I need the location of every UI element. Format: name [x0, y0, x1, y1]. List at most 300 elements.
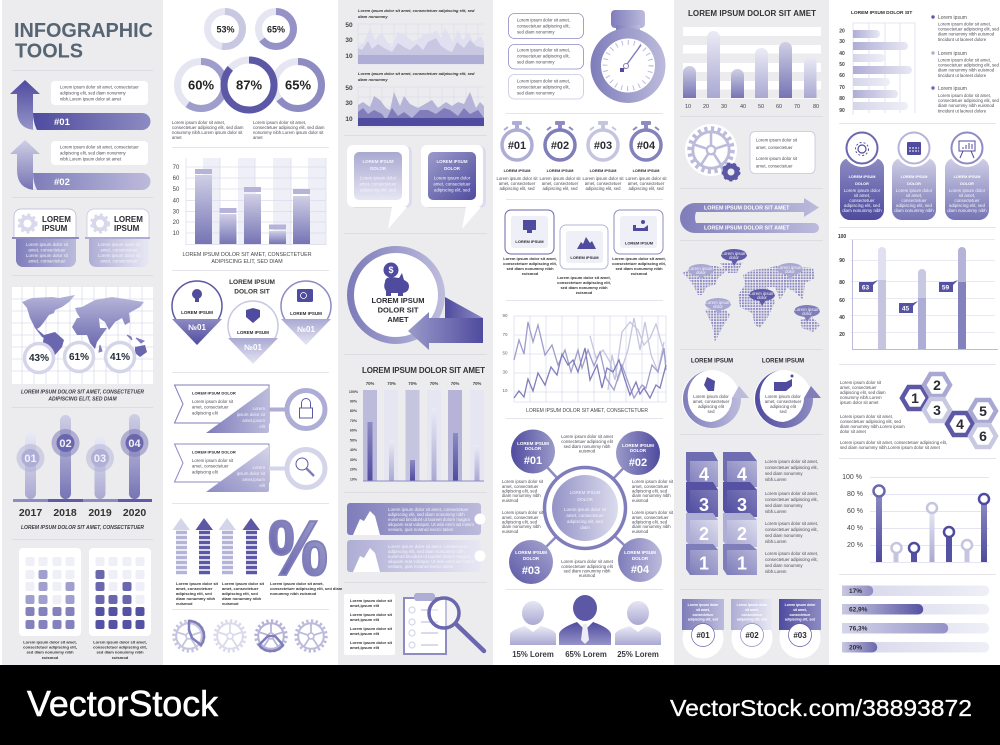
stacked arrow captions: adipiscing elit, sed: [176, 591, 212, 596]
small stopwatch 1: adipiscing elit, sed: [499, 186, 535, 191]
stacked number cubes: 3: [737, 495, 747, 515]
donut descriptions: nonummy nibh.Lorem ipsum dolor sit: [172, 130, 243, 135]
icon column card 1: consectetuer: [849, 198, 875, 203]
small stopwatch 2: #02: [551, 140, 569, 152]
hexagon descriptions: Lorem ipsum dolor sit amet, consectetuer adipiscing elit,: [840, 440, 947, 445]
stacked number cubes: 4: [737, 464, 747, 484]
text boxes top: sed diam nonummy: [517, 60, 555, 64]
arrow step 02: #02: [54, 177, 70, 188]
progress bars: 62,9%: [849, 606, 868, 614]
area chart 2: 50: [345, 85, 353, 92]
donut charts: [178, 12, 322, 110]
lollipop chart: 20 %: [847, 542, 863, 549]
area chart 2: diam nonummy: [358, 77, 388, 82]
icon card 2: Lorem ipsum dolor sit amet,: [557, 275, 611, 280]
dotted world map: dolor: [696, 270, 706, 275]
hexagons: 6: [979, 428, 987, 444]
cube descriptions: Lorem ipsum dolor sit amet,: [765, 521, 818, 526]
icon column card 1: LOREM IPSUM: [849, 175, 875, 179]
column bar chart heading: LOREM IPSUM DOLOR SIT AMET: [688, 9, 816, 18]
title: INFOGRAPHIC: [14, 19, 153, 42]
small stopwatch 1: [496, 121, 538, 191]
icon card 3: Lorem ipsum dolor sit amet,: [612, 256, 666, 261]
hub diagram: #04: [631, 564, 650, 576]
dotted world map: dolor: [729, 255, 739, 260]
stacked arrow captions: diam nonummy nibh: [176, 596, 216, 601]
U-turn arrow: LOREM IPSUM DOLOR SIT AMET: [704, 206, 790, 212]
bar chart caption: LOREM IPSUM DOLOR SIT AMET, CONSECTETUER: [182, 252, 312, 258]
map caption: ADIPISCING ELIT, SED DIAM: [47, 396, 117, 402]
mountain banner 1: Lorem ipsum dolor sit amet, consectetuer: [388, 507, 469, 512]
timeline pillars: [13, 414, 152, 519]
small stopwatch 1: LOREM IPSUM: [504, 169, 530, 173]
pin 3: [281, 281, 331, 345]
grid captions: [23, 640, 147, 660]
percentage columns chart: 70%: [451, 381, 459, 386]
percentage columns chart: 50%: [350, 438, 358, 442]
timeline pillars: 04: [128, 438, 141, 450]
donut charts: 53%: [216, 24, 235, 34]
numbered tag 01: consectetuer: [692, 613, 714, 617]
numbered tag 02: sit amet,: [745, 608, 759, 612]
small stopwatch 2: adipiscing elit, sed: [542, 186, 578, 191]
icon column card 3: DOLOR: [960, 182, 974, 186]
small stopwatch 2: LOREM IPSUM: [547, 169, 573, 173]
horizontal bar chart: LOREM IPSUM DOLOR SIT: [851, 10, 912, 16]
dotted world map: Lorem ipsum: [688, 266, 714, 271]
checklist text box: Lorem ipsum dolor sit: [350, 640, 393, 645]
tagged bar chart: 80: [839, 280, 845, 286]
percentage columns chart: 60%: [350, 428, 358, 432]
percentage columns chart: 70%: [366, 381, 374, 386]
line chart: 30: [502, 370, 508, 374]
cube descriptions: Lorem ipsum dolor sit amet,: [765, 551, 818, 556]
text boxes top: sed diam nonummy: [517, 30, 555, 34]
mountain banner 2: [347, 540, 486, 572]
hexagons: 3: [933, 402, 941, 418]
percentage columns chart: 70%: [387, 381, 396, 386]
area chart 1: Lorem ipsum dolor sit amet, consectetuer adipiscing elit, sed: [358, 8, 475, 13]
horizontal bar chart: 70: [839, 85, 845, 91]
tagged bar chart: 40: [839, 315, 845, 321]
percentage columns chart: 40%: [350, 448, 358, 452]
icon card 1: sed diam nonummy nibh: [506, 266, 554, 271]
icon column card 2: LOREM IPSUM: [901, 175, 927, 179]
gear card 1: [12, 209, 79, 267]
stacked arrow captions: nonummy nibh euismod: [270, 591, 317, 596]
world map panel: [12, 287, 153, 384]
progress bars: [842, 586, 989, 652]
bar chart: 30: [173, 210, 180, 216]
hexagon descriptions: dolor sit amet: [840, 429, 867, 434]
mountain banner 1: aliquam erat volutpat. Ut wisi enim ad minim: [388, 522, 474, 527]
icon column card 2: DOLOR: [907, 182, 921, 186]
speech bubble 2: LOREM IPSUM: [437, 159, 468, 164]
percentage columns chart: 70%: [408, 381, 417, 386]
small stopwatch 2: amet, consectetuer: [542, 181, 579, 186]
gear text box: [750, 132, 815, 174]
bullet legend: tincidunt ut laoreet dolore: [938, 37, 987, 42]
donut descriptions: Lorem ipsum dolor sit amet,: [172, 120, 225, 125]
checklist text box: amet,ipsum elit: [350, 631, 380, 636]
gear card 1: IPSUM: [42, 224, 68, 233]
mountain banner 2: adipiscing elit, sed diam nonummy nibh: [388, 549, 465, 554]
stacked arrow captions: consectetuer adipiscing elit, sed diam: [270, 586, 343, 591]
circular arrow 1: amet, consectetuer: [693, 399, 730, 404]
mountain banner 1: [347, 503, 486, 535]
banner search: amet, consectetuer: [192, 464, 229, 468]
icon card 2: sed diam nonummy nibh: [560, 285, 608, 290]
stacked arrow captions: amet, consectetuer: [176, 586, 213, 591]
small stopwatch 1: amet, consectetuer: [499, 181, 536, 186]
lollipop chart: 100 %: [842, 474, 862, 481]
hub descriptions: euismod: [632, 498, 649, 503]
percentage columns chart: 80%: [350, 409, 358, 413]
area chart 1: 50: [345, 22, 353, 29]
column 6 dividers: [839, 124, 996, 574]
hub diagram: DOLOR: [630, 448, 647, 453]
speech bubble 1: LOREM IPSUM: [363, 159, 394, 164]
title: TOOLS: [15, 40, 83, 62]
hub descriptions: euismod: [579, 573, 596, 578]
gear card 1: Lorem ipsum dolor sit: [26, 253, 69, 258]
checklist text box: amet,ipsum elit: [350, 603, 380, 608]
percentage columns chart: 70%: [430, 381, 438, 386]
hub descriptions: adipiscing elit, sed: [502, 520, 538, 524]
circular arrow 2: amet, consectetuer: [765, 399, 802, 404]
gear card 2: [85, 209, 150, 267]
hub diagram: LOREM IPSUM: [515, 550, 547, 555]
icon column card 2: Lorem ipsum dolor: [896, 188, 933, 193]
circular arrow 2: Lorem ipsum dolor: [765, 394, 801, 399]
mountain banner 2: veniam, quis nostrud exerci tation: [388, 564, 454, 569]
horizontal bar chart: 30: [839, 39, 845, 45]
hexagons: 5: [979, 403, 987, 419]
donut descriptions: nonummy nibh.Lorem ipsum dolor sit: [253, 130, 324, 135]
grid captions: Lorem ipsum dolor sit amet,: [23, 640, 77, 644]
small stopwatch 3: adipiscing elit, sed: [585, 186, 621, 191]
stacked arrow captions: adipiscing elit, sed: [222, 591, 258, 596]
pin 3: №01: [297, 325, 315, 334]
hexagon descriptions: ipsum dolor sit amet: [840, 400, 879, 405]
pin 2: [228, 301, 278, 364]
numbered tag 03: #03: [793, 631, 807, 640]
numbered tag 03: adipiscing elit, sed: [785, 618, 815, 622]
line chart: 70: [502, 332, 508, 337]
world map panel: 61%: [69, 352, 89, 363]
hexagons: 4: [956, 416, 964, 432]
grid captions: consectetuer adipiscing elit,: [23, 644, 77, 650]
circular arrow 1: LOREM IPSUM: [691, 358, 733, 364]
bullet legend: tincidunt ut laoreet dolore: [938, 73, 987, 78]
hub descriptions: Lorem ipsum dolor sit: [632, 510, 674, 515]
icon column card 2: diam nonummy nibh: [894, 208, 934, 213]
people icons: 65% Lorem: [565, 650, 607, 659]
tagged bar chart: 90: [839, 258, 845, 264]
tagged bar chart: 20: [839, 332, 845, 338]
grid captions: Lorem ipsum dolor sit amet,: [93, 640, 147, 644]
banner lock: amet, consectetuer: [192, 404, 229, 410]
arrow step 02: adipiscing elit, sed diam nonummy: [60, 150, 127, 156]
arrow step 01: Lorem ipsum dolor sit amet, consectetuer: [60, 84, 139, 90]
gear text box: Lorem ipsum dolor sit: [756, 138, 798, 142]
lollipop chart: 40 %: [847, 525, 863, 532]
hub diagram: diam: [580, 525, 590, 530]
dotted world map: dolor: [757, 295, 767, 300]
column bar chart: 60: [776, 104, 782, 110]
icon card 2: LOREM IPSUM: [570, 255, 599, 260]
watermark footer: [0, 665, 1000, 745]
cube descriptions: sed diam nonummy: [765, 471, 803, 476]
hub descriptions: diam nonummy nibh: [502, 524, 541, 529]
numbered tag 02: #02: [745, 631, 759, 640]
column bar chart: 10: [685, 104, 691, 110]
small stopwatch 4: LOREM IPSUM: [633, 169, 659, 173]
tagged bar chart: 63: [862, 284, 869, 292]
banner lock: Lorem: [253, 406, 265, 411]
hub descriptions: Lorem ipsum dolor sit amet: [561, 434, 614, 439]
bullet legend: diam nonummy nibh euismod: [938, 68, 995, 72]
hub diagram: LOREM IPSUM: [517, 441, 549, 446]
pins heading: LOREM IPSUM: [229, 279, 275, 286]
icon card 3: LOREM IPSUM: [625, 240, 654, 246]
column bar chart: 40: [740, 104, 746, 110]
icon card 3: [612, 210, 666, 276]
stopwatch: [590, 10, 666, 103]
pin 3: LOREM IPSUM: [290, 311, 322, 316]
gear card 2: amet, consectetuer: [100, 258, 138, 264]
people icons: 15% Lorem: [512, 650, 554, 659]
column 5 dividers: [680, 116, 823, 590]
cube descriptions: nibh.Lorem: [765, 477, 787, 482]
piggy bank badge with arrow: [350, 250, 483, 350]
bullet legend: tincidunt ut laoreet dolore: [938, 108, 987, 114]
hub descriptions: euismod: [502, 498, 519, 503]
cube descriptions: Lorem ipsum dolor sit amet,: [765, 491, 818, 496]
speech bubble 1: Lorem ipsum dolor: [360, 176, 397, 180]
timeline pillars: 2017: [19, 507, 42, 519]
numbered tag 02: Lorem ipsum dolor: [737, 603, 768, 607]
gear card 1: LOREM: [42, 215, 71, 224]
small stopwatch 3: Lorem ipsum dolor sit: [582, 176, 624, 181]
donut charts: 65%: [267, 24, 285, 34]
stacked number cubes: 1: [737, 554, 747, 574]
icon column card 2: [892, 129, 936, 220]
U-turn arrow: [680, 198, 819, 233]
hexagons: 1: [911, 390, 919, 406]
area chart 2: 10: [345, 116, 353, 123]
progress bars: 76,3%: [849, 626, 868, 632]
bullet legend: Lorem ipsum dolor sit amet,: [938, 58, 991, 62]
small stopwatch 4: [625, 121, 667, 191]
hexagon descriptions: Lorem ipsum dolor sit: [840, 380, 882, 385]
icon column card 2: consectetuer: [901, 198, 927, 203]
small stopwatch 3: LOREM IPSUM: [590, 169, 616, 173]
progress bars: 17%: [849, 588, 862, 595]
text boxes top: Lorem ipsum dolor sit amet,: [517, 48, 570, 52]
percentage columns chart: [349, 381, 484, 482]
bullet legend: Lorem ipsum: [938, 86, 967, 92]
cube descriptions: sed diam nonummy: [765, 563, 803, 568]
bullet legend: Lorem ipsum: [938, 15, 967, 21]
bullet legend: Lorem ipsum dolor sit amet,: [938, 93, 991, 98]
hub descriptions: amet, consectetuer: [502, 515, 539, 520]
text boxes top: consectetuer adipiscing elit,: [517, 84, 570, 90]
hub descriptions: amet, consectetuer: [502, 484, 539, 489]
checklist text box: Lorem ipsum dolor sit: [350, 626, 393, 631]
lollipop chart: 80 %: [847, 491, 863, 498]
grid captions: sed diam nonummy nibh: [96, 650, 144, 654]
arrow step 01: [10, 80, 150, 130]
timeline pillars: 01: [24, 453, 37, 465]
small stopwatch 2: Lorem ipsum dolor sit: [539, 176, 581, 181]
hub descriptions: consectetuer adipiscing elit: [561, 439, 614, 444]
hub descriptions: euismod: [579, 448, 596, 454]
mountain banner 2: euismod tincidunt ut laoreet dolore magna: [388, 554, 470, 559]
hexagon descriptions: sed diam nonummy nibh.Lorem ipsum dolor sit amet: [840, 445, 941, 450]
bar chart: [173, 158, 326, 245]
timeline pillars: 02: [59, 438, 72, 450]
icon column card 3: Lorem ipsum dolor: [949, 188, 986, 193]
stacked number cubes: [686, 452, 757, 575]
banner lock: [174, 385, 325, 433]
hub descriptions: Lorem ipsum dolor sit: [502, 479, 544, 484]
column backgrounds: [2, 0, 829, 665]
stacked arrow captions: amet, consectetuer: [222, 586, 259, 591]
speech bubble 1: DOLOR: [370, 166, 387, 171]
horizontal bar chart: [839, 10, 915, 115]
icon card 2: euismod: [576, 290, 593, 295]
timeline caption: LOREM IPSUM DOLOR SIT AMET, CONSECTETUER: [21, 525, 144, 531]
donut charts: 60%: [188, 78, 214, 92]
stacked number cubes: 2: [699, 524, 709, 544]
small stopwatch 4: amet, consectetuer: [628, 181, 665, 186]
text boxes top: sed diam nonummy: [517, 90, 555, 96]
cube descriptions: nibh.Lorem: [765, 539, 787, 544]
watermark footer: VectorStock: [27, 683, 219, 724]
text boxes top: Lorem ipsum dolor sit amet,: [517, 18, 570, 22]
text boxes top: [508, 14, 584, 99]
icon card 2: [557, 225, 611, 295]
hub descriptions: diam nonummy nibh: [632, 493, 671, 498]
small stopwatch 2: [539, 121, 581, 191]
speech bubble 2: Lorem ipsum dolor: [434, 176, 471, 180]
checklist text box: amet,ipsum elit: [350, 617, 380, 622]
horizontal bar chart: 40: [839, 51, 845, 57]
small stopwatch 4: #04: [637, 140, 656, 152]
dotted world map: Lorem ipsum: [749, 291, 775, 296]
dotted world map: Lorem ipsum: [721, 251, 747, 256]
dotted world map: Lorem ipsum: [777, 265, 803, 270]
area chart 1: [345, 8, 484, 64]
donut descriptions: Lorem ipsum dolor sit amet,: [253, 120, 306, 125]
hexagon descriptions: Lorem ipsum dolor sit amet,: [840, 414, 893, 419]
speech bubble 2: [421, 145, 486, 229]
cube descriptions: consectetuer adipiscing elit,: [765, 497, 818, 502]
timeline pillars: 03: [94, 453, 106, 465]
dotted world map: [682, 249, 820, 342]
donut descriptions: consectetuer adipiscing elit, sed diam: [172, 125, 244, 130]
small stopwatch 4: Lorem ipsum dolor sit: [625, 176, 667, 181]
gear card 1: amet, consectetuer: [28, 248, 66, 252]
hub descriptions: euismod: [632, 529, 649, 534]
pin 1: [172, 281, 222, 345]
people icons: 25% Lorem: [617, 650, 659, 659]
numbered tag 02: consectetuer: [741, 613, 763, 617]
hexagon descriptions: amet, consectetuer: [840, 385, 877, 390]
U-turn arrow: LOREM IPSUM DOLOR SIT AMET: [704, 226, 790, 232]
stacked number cubes: 2: [737, 524, 747, 544]
gear card 2: amet, consectetuer: [100, 248, 138, 252]
horizontal bar chart: 50: [839, 62, 845, 68]
hub diagram: DOLOR: [523, 556, 540, 561]
stacked arrow captions: [176, 581, 343, 606]
hub descriptions: diam nonummy nibh: [502, 493, 541, 498]
hub diagram: #03: [522, 565, 540, 577]
dotted world map: dolor: [713, 304, 723, 309]
column bar chart: 30: [721, 104, 727, 110]
hub descriptions: adipiscing elit, sed: [632, 520, 668, 524]
numbered tag 01: sit amet,: [696, 608, 710, 612]
bullet legend: consectetuer adipiscing elit, sed: [938, 26, 1000, 32]
bar chart: 20: [173, 220, 180, 226]
icon column card 2: sit amet,: [906, 193, 922, 198]
gear row: [174, 621, 326, 651]
hub diagram: amet, consectetuer: [566, 513, 604, 518]
stacked arrow captions: Lorem ipsum dolor sit: [176, 581, 219, 586]
gear card 2: Lorem ipsum dolor sit: [98, 253, 141, 258]
circular arrow 1: sed: [708, 409, 715, 414]
hub diagram: LOREM IPSUM: [624, 550, 656, 555]
small stopwatch 3: [582, 121, 624, 191]
column 2 dividers: [172, 148, 329, 610]
text boxes top: consectetuer adipiscing elit,: [517, 24, 570, 28]
timeline pillars: 2019: [88, 507, 112, 519]
dotted world map: dolor: [785, 269, 795, 274]
icon card 3: euismod: [631, 271, 648, 276]
percentage columns chart: 100%: [349, 390, 359, 394]
mountain banner 1: euismod tincidunt ut laoreet dolore magna: [388, 517, 470, 522]
banner lock: amet,ipsum: [242, 418, 265, 423]
horizontal bar chart: 20: [839, 28, 845, 34]
icon column card 3: [945, 129, 989, 220]
icon column card 3: adipiscing elit, sed: [949, 203, 985, 208]
hub descriptions: Lorem ipsum dolor sit: [632, 479, 674, 484]
banner lock: elit: [259, 424, 266, 429]
tagged bar chart: 59: [942, 284, 949, 292]
icon card 1: consectetuer adipiscing elit,: [503, 261, 557, 266]
horizontal bar chart: 80: [839, 96, 845, 102]
bullet legend: diam nonummy nibh euismod: [938, 32, 995, 36]
donut descriptions: consectetuer adipiscing elit, sed diam: [253, 125, 325, 130]
hub descriptions: [502, 434, 674, 578]
line chart: 90: [502, 313, 508, 318]
donut charts: 65%: [285, 78, 311, 92]
pin 2: №01: [244, 343, 262, 352]
circular arrow 1: Lorem ipsum dolor: [693, 394, 729, 399]
bar chart: 50: [173, 187, 180, 193]
gear text box: amet, consectetuer: [756, 145, 793, 150]
timeline pillars: 2020: [123, 507, 146, 519]
icon column card 3: consectetuer: [954, 198, 980, 203]
mountain banner 1: veniam, quis nostrud exerci tation: [388, 527, 454, 532]
grid captions: euismod: [42, 655, 59, 660]
donut descriptions: amet: [253, 135, 263, 140]
numbered tag 03: Lorem ipsum dolor: [785, 603, 816, 607]
cube descriptions: consectetuer adipiscing elit,: [765, 465, 818, 470]
clipboard with magnifier: [404, 593, 484, 654]
title: [14, 19, 153, 62]
